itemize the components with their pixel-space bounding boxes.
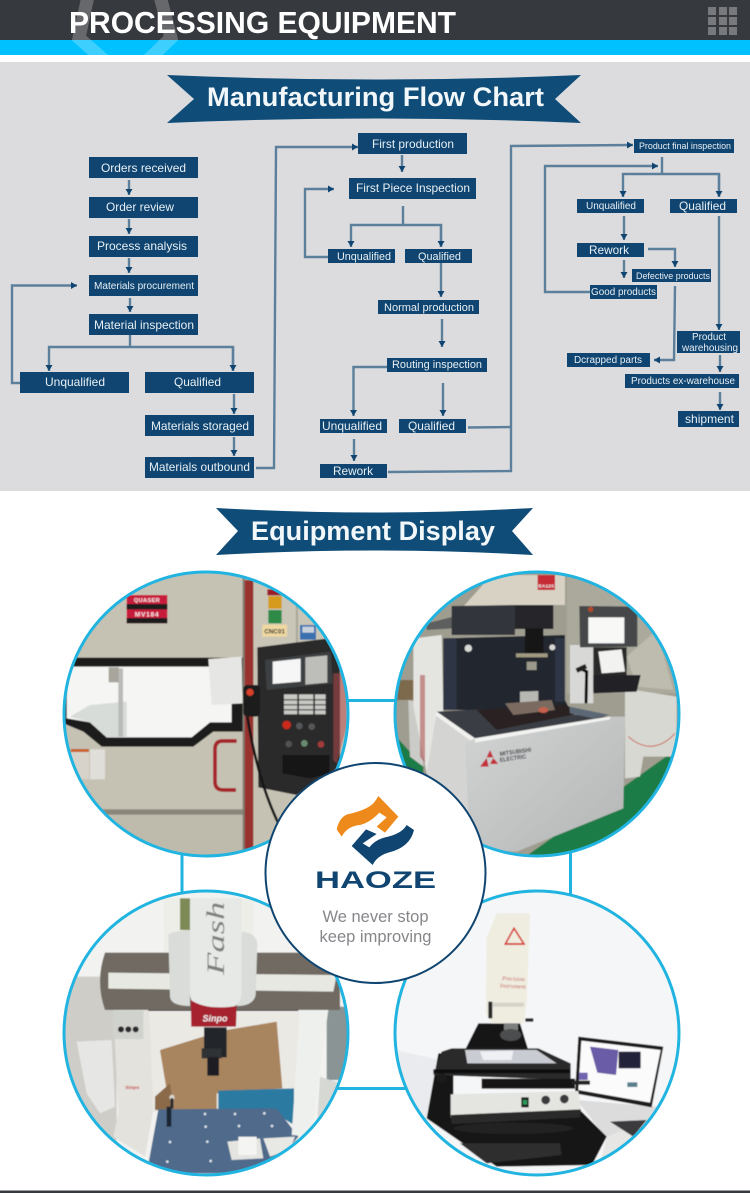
box: shipment	[678, 411, 739, 427]
photo: CNC machining centre: QUASER	[134, 598, 160, 604]
photo: CNC machining centre: CNC01	[264, 628, 285, 635]
box: materials procurement	[89, 275, 198, 296]
photo: optical measuring instrument: Precision	[501, 976, 525, 983]
photo: optical measuring instrument: Instrument	[499, 983, 526, 991]
box: qualified: Qualified	[679, 199, 726, 213]
box: rework	[320, 464, 387, 478]
box: routing inspection: Routing inspection	[392, 359, 482, 371]
box: rework: Rework	[589, 243, 630, 257]
box: first production: First production	[372, 137, 454, 151]
bottom bar	[0, 1190, 750, 1193]
tagline: We never stop	[322, 908, 429, 926]
box: shipment: shipment	[685, 412, 735, 426]
photo: Sinpo gantry robot	[62, 890, 350, 1176]
center brand circle	[266, 763, 486, 983]
box: product final inspection: Product final inspection	[639, 141, 731, 152]
box: materials procurement: Materials procurement	[94, 281, 194, 292]
box: unqualified	[20, 372, 129, 393]
photo: Sinpo gantry robot: Fash	[203, 902, 230, 976]
tagline	[320, 908, 431, 946]
box: qualified: Qualified	[174, 375, 221, 389]
photo: Sinpo gantry robot: Sinpo	[125, 1085, 139, 1091]
box: normal production: Normal production	[384, 302, 474, 314]
box: unqualified: Unqualified	[45, 375, 105, 389]
box: materials outbound	[145, 457, 254, 478]
box: dcrapped parts: Dcrapped parts	[574, 355, 642, 366]
box: unqualified	[577, 199, 644, 213]
cyan connector lines between photos	[180, 699, 572, 1090]
box: product warehousing	[677, 331, 740, 354]
icon: Haoze logo mark	[337, 796, 414, 865]
brand name: HAOZE	[315, 867, 436, 894]
box: unqualified: Unqualified	[337, 251, 391, 263]
box: material inspection: Material inspection	[94, 318, 194, 332]
photo: Mitsubishi EDM machine	[394, 570, 680, 858]
box: materials storaged: Materials storaged	[151, 419, 249, 433]
box: orders received: Orders received	[101, 161, 186, 175]
box: rework: Rework	[333, 464, 374, 478]
flow column 2 connectors	[305, 145, 633, 472]
photo: Mitsubishi EDM machine: MITSUBISHI	[499, 748, 532, 758]
photo: Sinpo gantry robot: Sinpo	[203, 1013, 228, 1023]
photo: Mitsubishi EDM machine: ELECTRIC	[499, 754, 527, 764]
flow column 1 boxes	[20, 157, 254, 478]
box: first piece inspection	[349, 178, 476, 199]
box: order review: Order review	[106, 200, 174, 214]
ribbon heading: equipment display: Equipment Display	[251, 516, 495, 546]
flow column 2 boxes	[320, 133, 487, 478]
box: defective products: Defective products	[636, 271, 710, 282]
box: dcrapped parts	[567, 353, 650, 367]
photo: optical measuring instrument	[394, 890, 680, 1176]
photo: CNC machining centre: MV184	[135, 612, 159, 619]
box: product warehousing: Product	[692, 332, 726, 343]
box: order review	[89, 197, 198, 218]
box: materials storaged	[145, 415, 254, 436]
box: material inspection	[89, 314, 198, 335]
box: first piece inspection: First Piece Inspection	[356, 181, 470, 195]
box: good products: Good products	[591, 287, 656, 298]
box: products ex-warehouse: Products ex-warehouse	[631, 376, 735, 387]
box: qualified: Qualified	[418, 251, 461, 263]
ribbon heading: equipment display	[216, 508, 533, 555]
header banner	[0, 0, 750, 62]
box: unqualified: Unqualified	[322, 419, 382, 433]
header title: PROCESSING EQUIPMENT	[69, 5, 456, 40]
box: qualified: Qualified	[408, 419, 455, 433]
photo: CNC machining centre	[62, 570, 350, 858]
box: process analysis: Process analysis	[97, 239, 187, 253]
box: qualified	[405, 249, 472, 263]
box: unqualified: Unqualified	[586, 201, 636, 212]
box: first production	[358, 133, 467, 154]
flow column 3 boxes	[567, 139, 740, 427]
photo: Mitsubishi EDM machine: EA12S	[538, 583, 555, 589]
box: process analysis	[89, 236, 198, 257]
panel: manufacturing flow chart	[0, 62, 750, 491]
ribbon heading: manufacturing flow chart	[167, 75, 581, 123]
box: qualified	[145, 372, 254, 393]
flow column 1 connectors	[12, 147, 358, 468]
box: materials outbound: Materials outbound	[149, 460, 250, 474]
box: product warehousing: warehousing	[681, 343, 738, 354]
tagline: keep improving	[320, 928, 431, 946]
flow column 3 connectors	[545, 157, 720, 410]
box: orders received	[89, 157, 198, 178]
ribbon heading: manufacturing flow chart: Manufacturing Flow Chart	[207, 82, 544, 112]
icon: grid menu	[708, 7, 737, 35]
box: rework	[577, 243, 644, 257]
